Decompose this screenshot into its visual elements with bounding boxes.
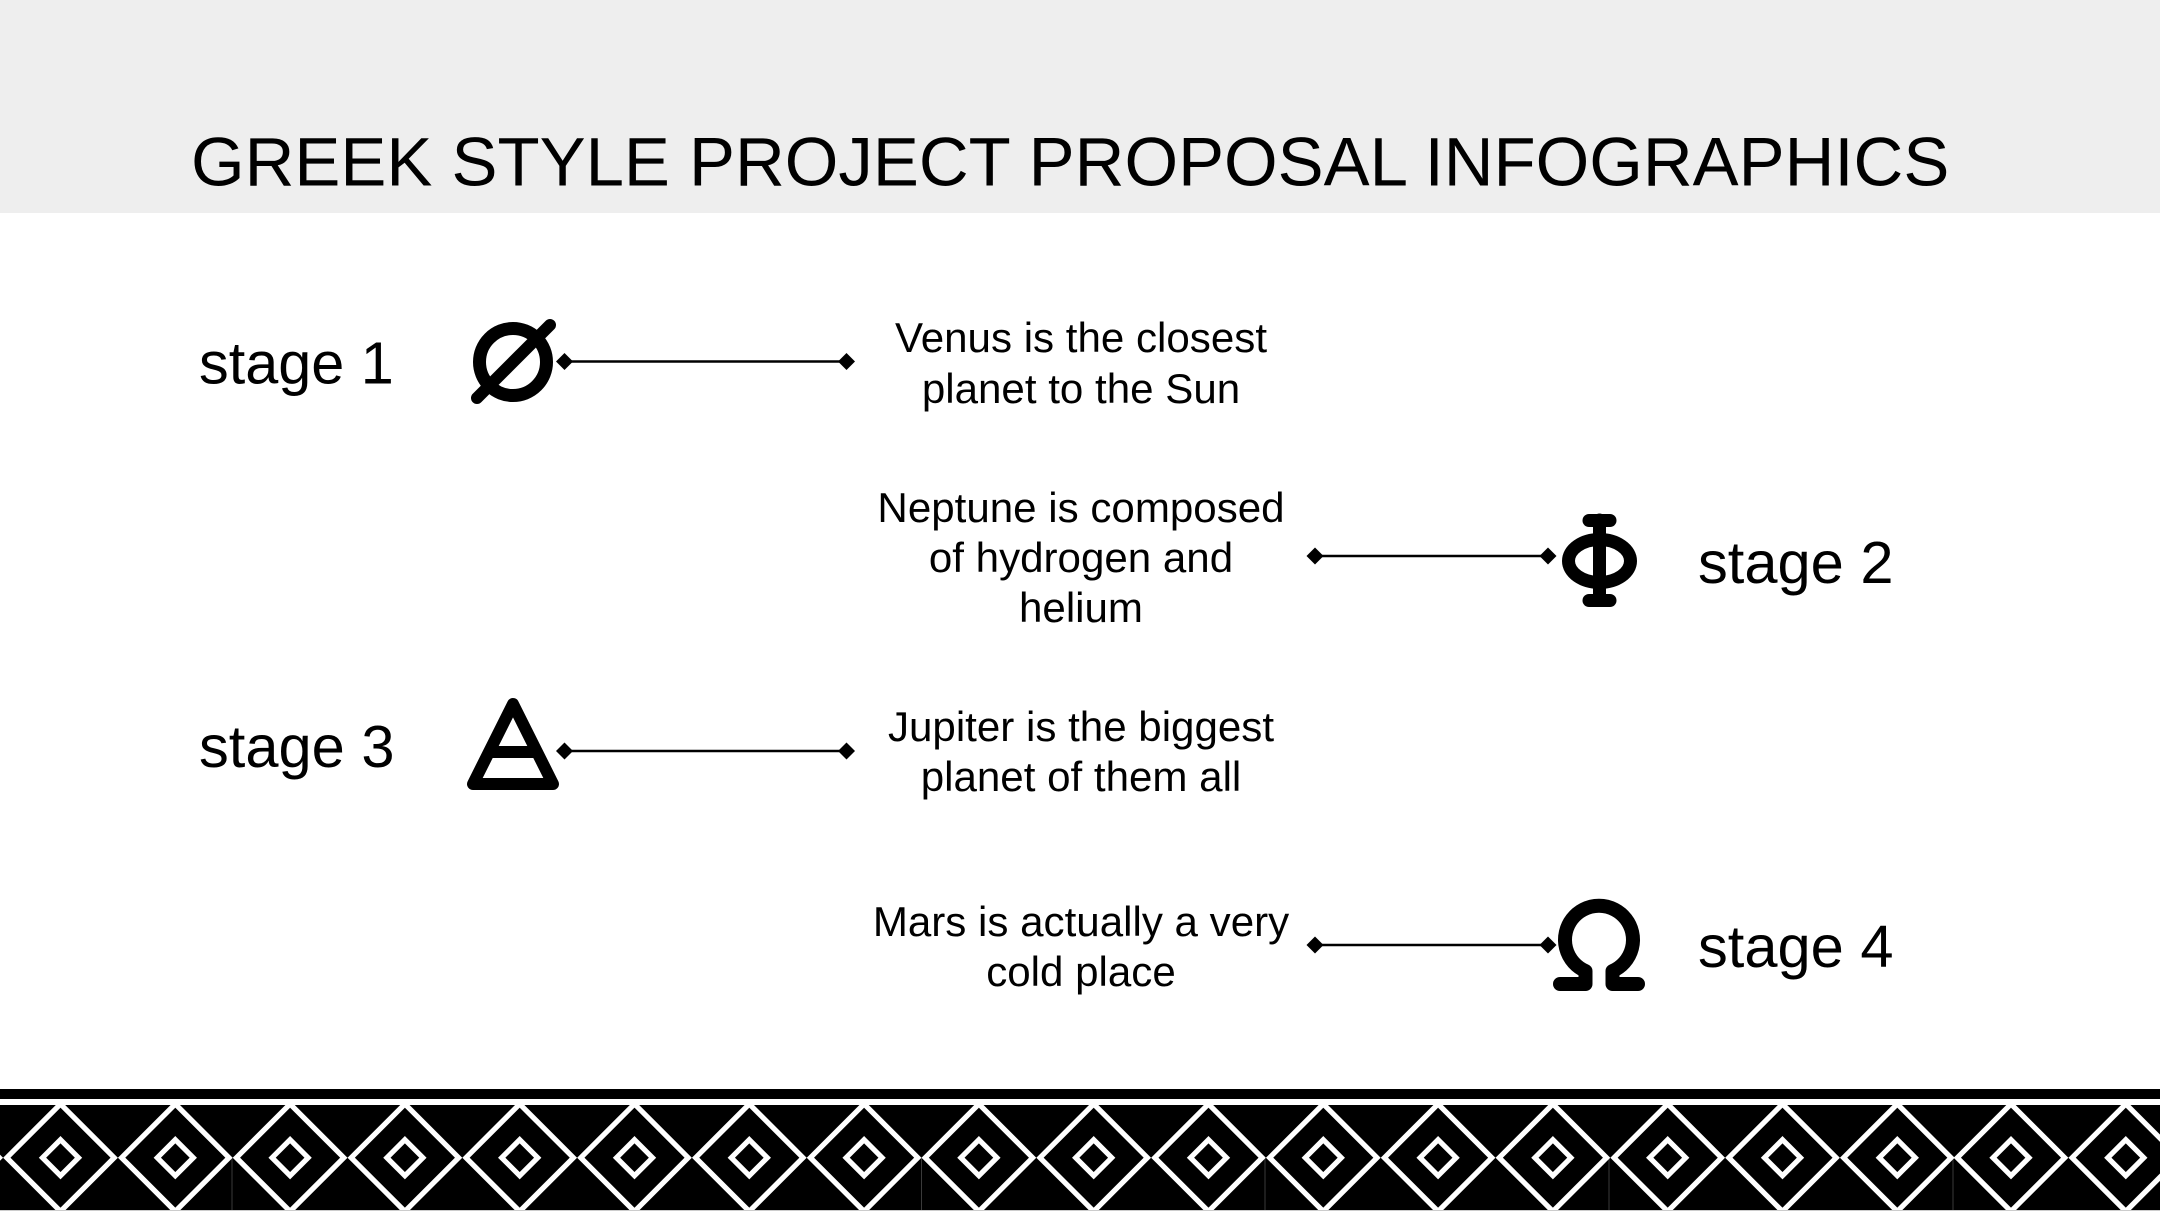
stage 4 label: stage 4 bbox=[1698, 913, 1893, 980]
description 1: planet to the Sun bbox=[922, 365, 1240, 412]
icon: phi bbox=[1568, 520, 1630, 600]
connector arrow 2 bbox=[1306, 548, 1556, 564]
stage 4 row bbox=[873, 898, 1893, 995]
header band bbox=[0, 0, 2160, 213]
icon: triangle with bar bbox=[473, 704, 553, 784]
stage 1 row bbox=[199, 314, 1267, 412]
icon: omega bbox=[1560, 906, 1638, 984]
description 1: Venus is the closest bbox=[895, 314, 1267, 361]
connector arrow 3 bbox=[556, 742, 855, 760]
description 2: Neptune is composed bbox=[877, 484, 1285, 531]
stage 3 row bbox=[199, 703, 1274, 800]
stage 1 label: stage 1 bbox=[199, 330, 394, 396]
greek key border bbox=[0, 1089, 2160, 1211]
stage 2 row bbox=[877, 484, 1893, 631]
icon: slashed circle bbox=[477, 325, 550, 398]
stage 3 label: stage 3 bbox=[199, 713, 394, 780]
description 4: cold place bbox=[986, 948, 1176, 995]
connector arrow 1 bbox=[556, 353, 855, 370]
description 2: helium bbox=[1019, 584, 1143, 631]
stage 2 label: stage 2 bbox=[1698, 529, 1893, 596]
title: GREEK STYLE PROJECT PROPOSAL INFOGRAPHICS bbox=[191, 124, 1949, 200]
connector arrow 4 bbox=[1306, 936, 1556, 954]
description 4: Mars is actually a very bbox=[873, 898, 1289, 945]
description 3: Jupiter is the biggest bbox=[888, 703, 1274, 750]
description 2: of hydrogen and bbox=[929, 534, 1233, 581]
description 3: planet of them all bbox=[921, 753, 1241, 800]
